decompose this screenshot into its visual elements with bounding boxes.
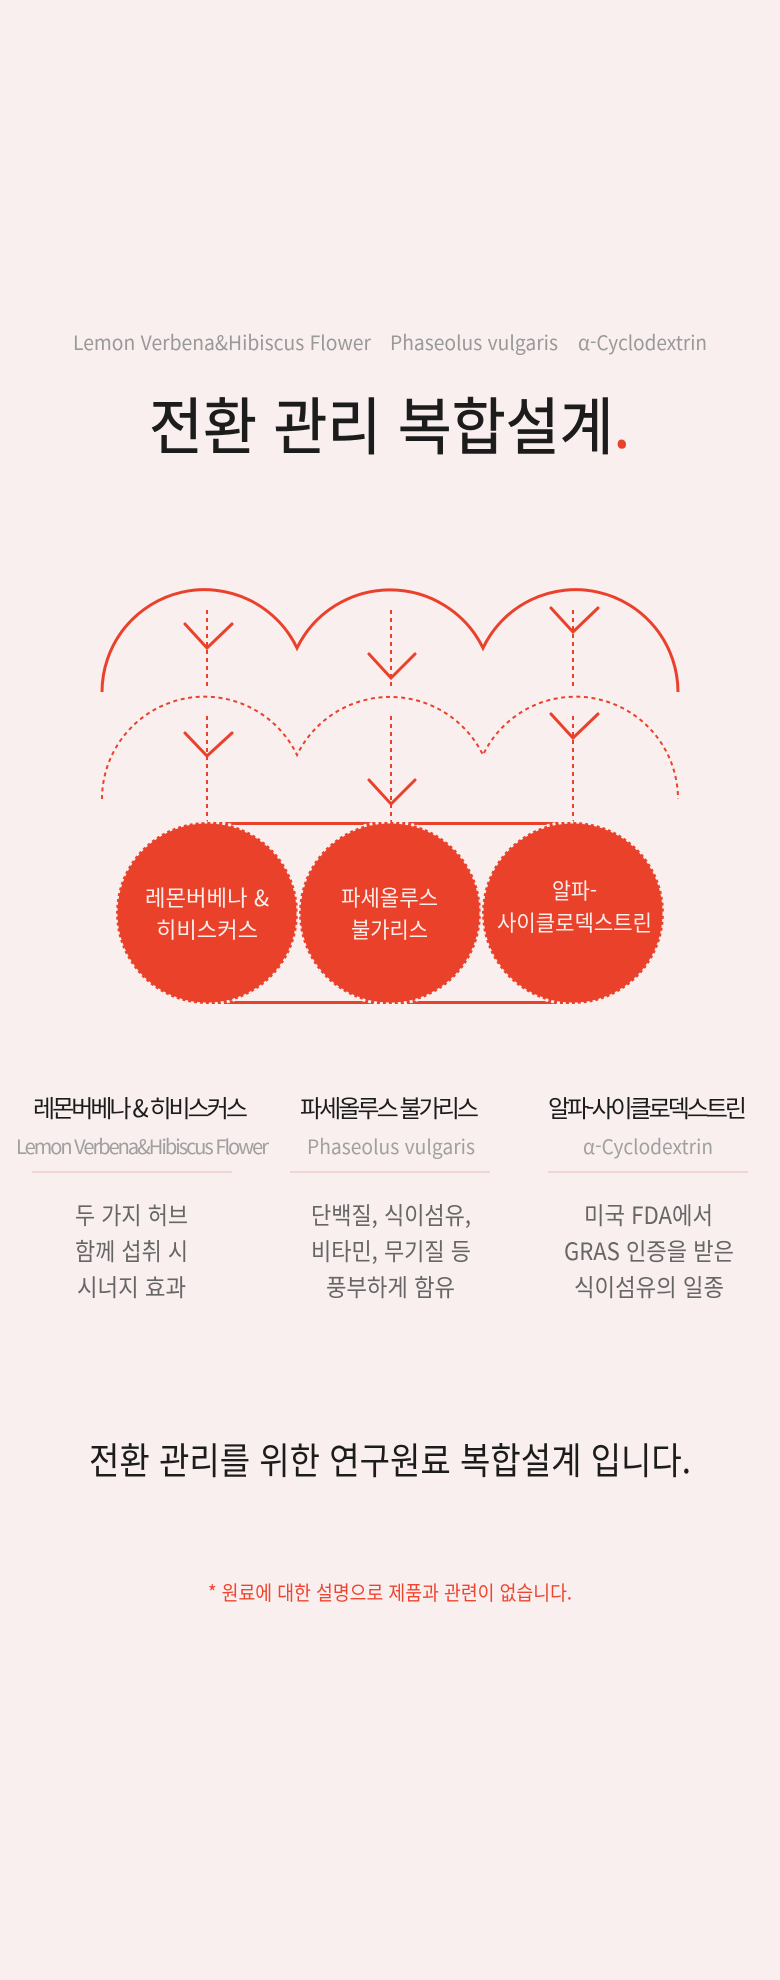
- latin name: Lemon Verbena&Hibiscus Flower: [16, 1131, 269, 1160]
- body text: 비타민, 무기질 등: [311, 1232, 471, 1267]
- body text: 두 가지 허브: [75, 1196, 188, 1231]
- body text: [564, 1196, 734, 1303]
- circle: lemon verbena and hibiscus: [116, 822, 298, 1004]
- ingredient names line: Lemon Verbena&Hibiscus Flower: [73, 327, 371, 356]
- diagram: arcs, arrows and ingredient circles: [102, 590, 678, 1004]
- body text: [75, 1196, 188, 1303]
- header: ingredient names and title: [73, 327, 707, 467]
- ingredient names line: Phaseolus vulgaris: [390, 327, 558, 356]
- circle: phaseolus vulgaris: 불가리스: [351, 913, 428, 945]
- heading: 레몬버베나 & 히비스커스: [33, 1089, 248, 1124]
- arrow chevrons: [185, 608, 598, 804]
- circle: alpha cyclodextrin: 알파-: [552, 874, 597, 906]
- footnote: * 원료에 대한 설명으로 제품과 관련이 없습니다.: [208, 1577, 572, 1606]
- body text: 식이섬유의 일종: [574, 1268, 724, 1303]
- body text: 시너지 효과: [77, 1268, 186, 1303]
- latin name: Phaseolus vulgaris: [307, 1131, 475, 1160]
- panel: phaseolus vulgaris description: [290, 1089, 490, 1303]
- solid arcs: [102, 590, 678, 692]
- panel: alpha cyclodextrin description: [548, 1089, 748, 1303]
- heading: 파세올루스 불가리스: [300, 1089, 479, 1124]
- circle: phaseolus vulgaris: [299, 822, 481, 1004]
- title: 전환 관리 복합설계.: [149, 377, 630, 467]
- connecting lines: [207, 824, 573, 1002]
- dashed arcs: [102, 697, 678, 799]
- dashed vertical guide lines: [207, 610, 573, 823]
- heading: 알파-사이클로덱스트린: [548, 1089, 747, 1124]
- body text: 미국 FDA에서: [584, 1196, 713, 1231]
- body text: GRAS 인증을 받은: [564, 1232, 734, 1267]
- latin name: α-Cyclodextrin: [583, 1131, 713, 1160]
- body text: 풍부하게 함유: [326, 1268, 455, 1303]
- closing statement: 전환 관리를 위한 연구원료 복합설계 입니다.: [89, 1431, 691, 1485]
- ingredient names line: α-Cyclodextrin: [578, 327, 707, 356]
- circle: phaseolus vulgaris: 파세올루스: [341, 881, 438, 913]
- body text: [311, 1196, 471, 1303]
- circle: lemon verbena and hibiscus: 히비스커스: [156, 913, 258, 945]
- body text: 함께 섭취 시: [75, 1232, 188, 1267]
- ingredient names line: [73, 327, 707, 356]
- circle: alpha cyclodextrin: [482, 822, 664, 1004]
- circle: alpha cyclodextrin: 사이클로덱스트린: [497, 906, 652, 938]
- body text: 단백질, 식이섬유,: [311, 1196, 471, 1231]
- circle: lemon verbena and hibiscus: 레몬버베나 &: [145, 881, 269, 913]
- panel: lemon verbena and hibiscus description: [16, 1089, 269, 1303]
